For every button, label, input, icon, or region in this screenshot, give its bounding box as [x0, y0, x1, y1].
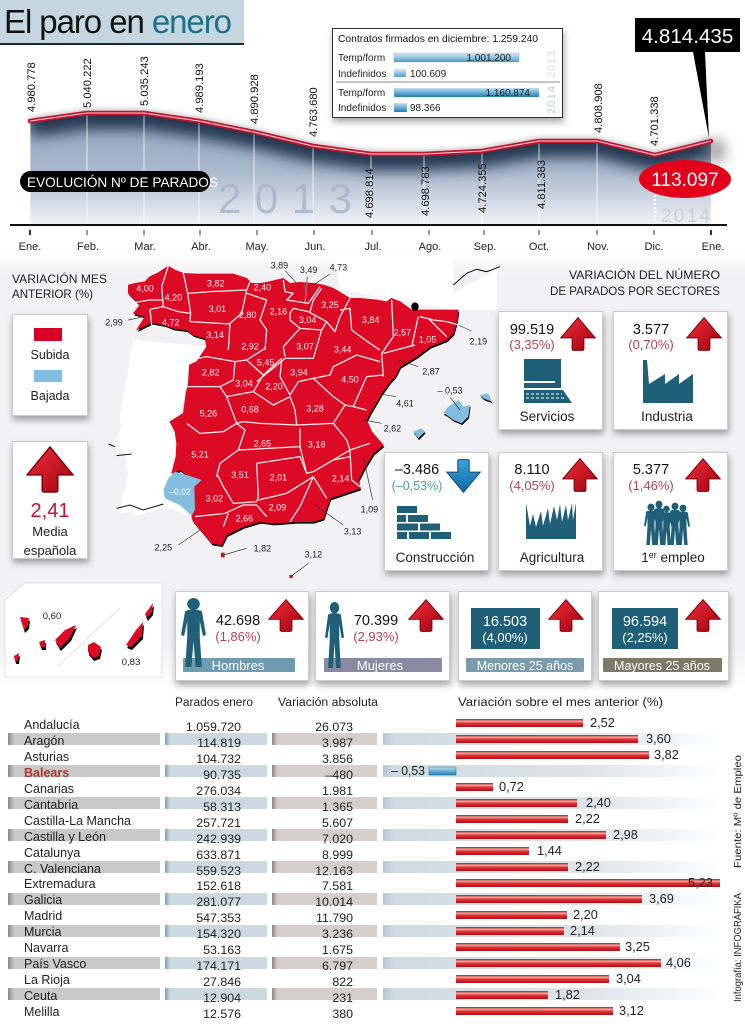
card: Industria: (0,70%)	[628, 337, 674, 352]
card: Mujeres: 70.399	[354, 613, 398, 629]
table headers: Parados enero	[175, 697, 253, 709]
table: variación absoluta: –480	[325, 768, 353, 782]
monthly values: 4.724.355	[477, 163, 489, 213]
table: parados enero: 281.077	[196, 895, 241, 909]
legend	[12, 314, 88, 416]
Balearic islands	[413, 393, 492, 440]
card: Mujeres	[316, 592, 450, 680]
values inside provinces: 3,18	[308, 439, 325, 449]
callout: difference	[639, 160, 731, 198]
axis: Jun.	[305, 241, 325, 253]
table: region names: Navarra	[24, 941, 69, 955]
panel: contratos: Temp/form	[338, 88, 385, 99]
values outside provinces: 2,62	[384, 423, 401, 433]
panel: contratos: 2013	[546, 51, 558, 78]
values outside provinces: 3,12	[305, 549, 322, 559]
values outside provinces: 3,89	[271, 261, 288, 271]
values inside provinces: 2,92	[241, 342, 259, 352]
table: parados enero: 104.732	[196, 752, 241, 766]
card: Industria	[614, 312, 728, 430]
table: variación absoluta: 5.607	[322, 816, 353, 830]
table stripes	[8, 733, 723, 1000]
monthly values: 5.040.222	[82, 58, 94, 108]
values inside provinces: 2,80	[239, 310, 256, 320]
card: Servicios	[498, 312, 602, 430]
table: region names: Galicia	[24, 893, 62, 907]
panel: media española: 2,41	[31, 500, 69, 522]
values inside provinces: 3,07	[296, 342, 314, 352]
legend: Bajada	[31, 389, 70, 403]
card: 1er empleo: 1	[641, 550, 649, 565]
callout: total	[635, 18, 740, 138]
table: region names: La Rioja	[24, 973, 70, 987]
panel: contratos: 1.001.200	[466, 53, 511, 64]
bar chart: variación sobre el mes anterior: 5,23	[688, 875, 713, 890]
table: region names: Cantabria	[24, 798, 78, 812]
values inside provinces: 2,14	[332, 473, 349, 483]
bar chart: variación sobre el mes anterior: 3,04	[616, 971, 641, 986]
table: variación absoluta: 3.236	[322, 927, 353, 941]
values inside provinces: 2,09	[269, 502, 286, 512]
table: region names: Madrid	[24, 909, 62, 923]
values outside provinces: 3,13	[344, 527, 361, 537]
card: Agricultura: Agricultura	[520, 550, 585, 565]
table headers: Variación absoluta	[278, 697, 379, 709]
leader lines	[128, 271, 472, 577]
values inside provinces: 5,45	[257, 357, 274, 367]
card: Menores 25 años: Menores 25 años	[477, 659, 573, 673]
table: parados enero	[186, 720, 241, 1021]
table: parados enero: 547.353	[196, 911, 241, 925]
year 2013: 2013	[218, 175, 352, 222]
bar chart: variación sobre el mes anterior: 3,25	[625, 939, 650, 954]
card: Menores 25 años: (4,00%)	[482, 630, 528, 645]
card: Agricultura: 8.110	[514, 462, 550, 478]
table: parados enero: 242.939	[196, 832, 241, 846]
values inside provinces: 2,66	[236, 513, 253, 523]
card: Menores 25 años	[458, 592, 592, 680]
values inside provinces: 5,21	[191, 449, 209, 459]
table: region names: Castilla y León	[24, 830, 106, 844]
table: parados enero: 257.721	[196, 816, 241, 830]
map inset: Canarias	[5, 583, 162, 677]
table: variación absoluta: 12.163	[315, 864, 353, 878]
monthly values: 4.890.928	[249, 74, 261, 124]
values inside provinces: 2,57	[394, 328, 411, 338]
values inside provinces: 1,05	[419, 334, 436, 344]
provinces in red	[128, 266, 458, 545]
card: Agricultura: (4,05%)	[509, 478, 555, 493]
callout: difference: 113.097	[651, 170, 719, 191]
values inside provinces: 2,65	[254, 438, 271, 448]
values inside provinces: 3,44	[334, 344, 351, 354]
panel: contratos: 100.609	[410, 69, 447, 80]
bar chart: variación sobre el mes anterior: 1,44	[537, 843, 562, 858]
axis: Mar.	[134, 241, 156, 253]
values outside provinces: 2,25	[155, 542, 172, 552]
table: variación absoluta: 231	[332, 991, 353, 1005]
card: Servicios: (3,35%)	[509, 337, 555, 352]
card: Menores 25 años: 16.503	[483, 614, 527, 630]
heading: variación mes anterior: ANTERIOR (%)	[12, 287, 93, 301]
values inside provinces	[136, 278, 436, 523]
values inside provinces: 3,02	[206, 493, 223, 503]
card: 1er empleo: empleo	[657, 550, 705, 565]
bar chart: variación sobre el mes anterior: 0,72	[499, 779, 524, 794]
chart: evolución nº de parados	[10, 18, 740, 253]
table: variación absoluta: 3.856	[322, 752, 353, 766]
panel: contratos	[332, 28, 562, 118]
bar chart: variación sobre el mes anterior: – 0,53	[391, 763, 425, 778]
card: Construcción: Construcción	[396, 550, 474, 565]
card: Industria: 3.577	[633, 322, 669, 338]
axis: Abr.	[191, 241, 211, 253]
monthly values	[26, 56, 661, 218]
panel: contratos: Indefinidos	[338, 103, 386, 114]
heading: sectores: DE PARADOS POR SECTORES	[550, 284, 720, 298]
card: Mayores 25 años: (2,25%)	[622, 630, 668, 645]
values inside provinces: 3,01	[209, 304, 226, 314]
neighbouring borders	[108, 267, 500, 510]
values outside provinces: 4,73	[330, 263, 347, 273]
table: region names: Castilla-La Mancha	[24, 814, 131, 828]
values outside provinces: 1,82	[254, 543, 271, 553]
table: region names: C. Valenciana	[24, 862, 101, 876]
card: Mujeres: (2,93%)	[353, 629, 399, 644]
axis: Ene.	[19, 241, 41, 253]
table: variación absoluta: 6.797	[322, 959, 353, 973]
icon: grass	[526, 503, 576, 539]
values outside provinces: 4,61	[396, 398, 414, 408]
table: parados enero: 633.871	[196, 848, 241, 862]
bar chart: variación sobre el mes anterior: 3,82	[654, 747, 679, 762]
monthly values: 4.698.814	[364, 168, 376, 218]
bar chart: variación sobre el mes anterior: 1,82	[555, 987, 580, 1002]
land: Portugal and France	[113, 256, 497, 513]
values inside provinces: 3,51	[231, 470, 249, 480]
axis: Oct.	[529, 241, 549, 253]
table: parados enero: 174.171	[196, 959, 241, 973]
bar chart: variación sobre el mes anterior: 3,69	[649, 891, 674, 906]
values outside provinces: 1,09	[361, 504, 378, 514]
values inside provinces: 4,50	[341, 374, 359, 384]
map of Spain	[105, 256, 500, 578]
title: El paro en enero	[4, 3, 232, 40]
panel: contratos: 98.366	[410, 103, 441, 114]
panel: contratos: Contratos firmados en diciembre: 1.259.240	[338, 33, 538, 45]
table: region names: Asturias	[24, 750, 69, 764]
monthly values: 4.808.908	[593, 83, 605, 133]
monthly values: 4.811.383	[536, 160, 548, 209]
province borders	[128, 266, 458, 527]
background	[0, 250, 745, 690]
card: Hombres: Hombres	[212, 658, 265, 673]
bar chart: variación sobre el mes anterior: 3,12	[619, 1003, 644, 1018]
axis: Ene.	[702, 241, 724, 253]
bar chart: variación sobre el mes anterior: 2,40	[586, 795, 611, 810]
axis: Dic.	[645, 241, 663, 253]
credit: Infografía: INFOGRÁFIKA	[731, 893, 744, 1002]
values inside provinces: 2,16	[270, 307, 287, 317]
Andorra	[411, 302, 419, 311]
area under the line	[30, 105, 725, 225]
table: region names: Murcia	[24, 925, 62, 939]
values inside provinces: 2,40	[254, 282, 271, 292]
card: Construcción	[384, 452, 488, 570]
axis: Sep.	[474, 241, 496, 253]
bar chart: variación sobre el mes anterior: 2,22	[575, 811, 600, 826]
axis: Nov.	[587, 241, 609, 253]
callout: total: 4.814.435	[642, 25, 733, 48]
table: region names: País Vasco	[24, 957, 86, 971]
heading: sectores	[550, 267, 720, 298]
values outside provinces: 3,49	[300, 265, 317, 275]
panel: media española: Media	[32, 524, 68, 539]
heading: variación mes anterior	[12, 271, 107, 301]
table: region names: Melilla	[24, 1005, 59, 1019]
table: variación absoluta: 26.073	[315, 720, 353, 734]
table: parados enero: 114.819	[197, 736, 241, 750]
card: Hombres: (1,86%)	[215, 629, 261, 644]
icon: bricks	[397, 506, 451, 539]
legend: Subida	[31, 348, 70, 362]
table: parados enero: 58.313	[203, 800, 241, 814]
axis: Ago.	[419, 241, 441, 253]
axis: Feb.	[77, 241, 99, 253]
values inside provinces: 4,20	[165, 293, 182, 303]
table: region names: Balears	[24, 766, 69, 780]
table: parados enero: 1.059.720	[186, 720, 241, 734]
table: parados enero: 90.735	[203, 768, 241, 782]
values inside provinces: 3,84	[362, 315, 379, 325]
card: 1er empleo: (1,46%)	[628, 478, 674, 493]
values outside provinces: 2,19	[470, 337, 487, 347]
table: variación absoluta: 10.014	[315, 895, 353, 909]
bar chart: variación sobre el mes anterior: 2,14	[570, 923, 595, 938]
panel: contratos: Indefinidos	[338, 69, 386, 80]
bar chart: variación sobre el mes anterior: 3,60	[646, 731, 671, 746]
card: 1er empleo	[614, 452, 728, 570]
table: variación absoluta: 11.790	[316, 911, 353, 925]
icon: woman	[325, 602, 344, 668]
monthly values: 5.035.243	[139, 56, 151, 106]
table: parados enero: 12.576	[203, 1007, 241, 1021]
table headers	[175, 697, 663, 709]
bar chart: variación sobre el mes anterior: 2,52	[590, 715, 615, 730]
table: variación absoluta	[315, 720, 353, 1021]
panel: media española: española	[24, 543, 77, 558]
map inset: Canarias: 0,83	[122, 657, 140, 668]
values inside provinces: 3,14	[206, 330, 224, 340]
table: region names: Extremadura	[24, 877, 96, 891]
table: parados enero: 154.320	[196, 927, 241, 941]
icon: man	[181, 598, 206, 667]
table: parados enero: 27.846	[203, 975, 241, 989]
card: Hombres	[176, 592, 308, 680]
table: region names: Canarias	[24, 782, 74, 796]
card: Mayores 25 años: 96.594	[623, 614, 667, 630]
values inside provinces: 3,04	[235, 378, 253, 388]
monthly values: 4.980.778	[26, 62, 38, 112]
panel: contratos: Temp/form	[338, 53, 385, 64]
table: region names: Catalunya	[24, 846, 80, 860]
Huelva in blue	[163, 472, 202, 516]
monthly values: 4.989.193	[194, 63, 206, 113]
table: variación absoluta: 7.581	[322, 879, 353, 893]
card: Hombres: 42.698	[216, 613, 260, 629]
table: variación absoluta: 1.675	[322, 943, 353, 957]
table: region names	[24, 718, 131, 1019]
table headers: Variación sobre el mes anterior (%)	[458, 697, 663, 709]
values inside provinces: 3,25	[321, 300, 339, 310]
bar chart: variación sobre el mes anterior: 4,06	[666, 955, 691, 970]
monthly values: 4.701.338	[649, 96, 661, 146]
card: Construcción: (–0,53%)	[392, 479, 442, 493]
table: parados enero: 12.904	[203, 991, 241, 1005]
panel: contratos: 2014	[546, 86, 558, 114]
icon: computer	[524, 359, 572, 403]
heading: sectores: VARIACIÓN DEL NÚMERO	[569, 267, 720, 282]
icon: people	[644, 501, 690, 545]
values inside provinces: 0,68	[241, 404, 259, 414]
card: Servicios: 99.519	[510, 322, 554, 338]
axis	[10, 224, 727, 253]
label: evolución: EVOLUCIÓN Nº DE PARADOS	[27, 174, 218, 190]
table: parados enero: 53.163	[203, 943, 241, 957]
card: 1er empleo: 5.377	[633, 462, 669, 478]
card: 1er empleo: er	[649, 550, 657, 560]
values outside provinces: – 0,53	[438, 386, 462, 396]
values inside provinces: 2,01	[270, 472, 287, 482]
card: Industria: Industria	[641, 409, 693, 424]
table: variación absoluta: 1.365	[322, 800, 353, 814]
table: variación absoluta: 7.020	[322, 832, 353, 846]
table: variación absoluta: 380	[332, 1007, 353, 1021]
table: region names: Ceuta	[24, 989, 57, 1003]
bar chart: variación sobre el mes anterior: 2,22	[575, 859, 600, 874]
source: Fuente: Mº de Empleo	[732, 755, 744, 868]
values inside provinces: 2,82	[202, 368, 219, 378]
icon: factory	[643, 360, 693, 403]
values inside provinces: 4,00	[136, 283, 154, 293]
table: variación absoluta: 822	[332, 975, 353, 989]
table: region names: Aragón	[24, 734, 64, 748]
card: Agricultura	[498, 452, 602, 570]
table: variación absoluta: 1.981	[322, 784, 353, 798]
values inside provinces: 3,28	[306, 403, 324, 413]
table: parados enero: 276.034	[196, 784, 241, 798]
panel: media española	[12, 442, 88, 558]
year 2014: 2014	[661, 206, 710, 227]
table: variación absoluta: 3.987	[322, 736, 353, 750]
card: Mayores 25 años: Mayores 25 años	[614, 659, 710, 673]
values inside provinces: 5,26	[200, 408, 217, 418]
monthly values: 4.698.783	[420, 166, 432, 216]
map inset: Canarias: 0,60	[43, 611, 61, 622]
bar chart: variación sobre el mes anterior: 2,98	[613, 827, 638, 842]
bar chart: variación sobre el mes anterior: 2,20	[573, 907, 598, 922]
values inside provinces: 3,04	[299, 315, 316, 325]
line	[30, 113, 711, 155]
table: variación absoluta: 8.999	[322, 848, 353, 862]
axis: May.	[245, 241, 269, 253]
heading: variación mes anterior: VARIACIÓN MES	[12, 271, 107, 286]
values outside provinces	[105, 261, 487, 559]
Ceuta and Melilla	[221, 553, 293, 578]
values inside provinces: 4,72	[162, 318, 179, 328]
monthly values: 4.763.680	[308, 87, 320, 137]
table: parados enero: 152.618	[196, 879, 241, 893]
Huelva in blue: –0,02	[169, 487, 191, 497]
coast shadow	[129, 268, 459, 547]
values outside provinces: 2,99	[105, 318, 123, 328]
card: Mujeres: Mujeres	[357, 658, 404, 673]
bar chart: variación sobre el mes anterior	[391, 715, 720, 1018]
values inside provinces: 3,82	[207, 278, 224, 288]
values outside provinces: 2,87	[422, 367, 440, 377]
card: Servicios: Servicios	[520, 409, 575, 424]
Portugal cover	[120, 340, 210, 517]
card: Construcción: –3.486	[395, 462, 439, 478]
table: parados enero: 559.523	[196, 864, 241, 878]
card: Mayores 25 años	[598, 592, 728, 680]
axis: Jul.	[364, 241, 382, 253]
values inside provinces: 2,20	[265, 382, 283, 392]
panel: contratos: 1.160.874	[486, 88, 530, 99]
table: region names: Andalucía	[24, 718, 80, 732]
values inside provinces: 3,94	[290, 368, 308, 378]
